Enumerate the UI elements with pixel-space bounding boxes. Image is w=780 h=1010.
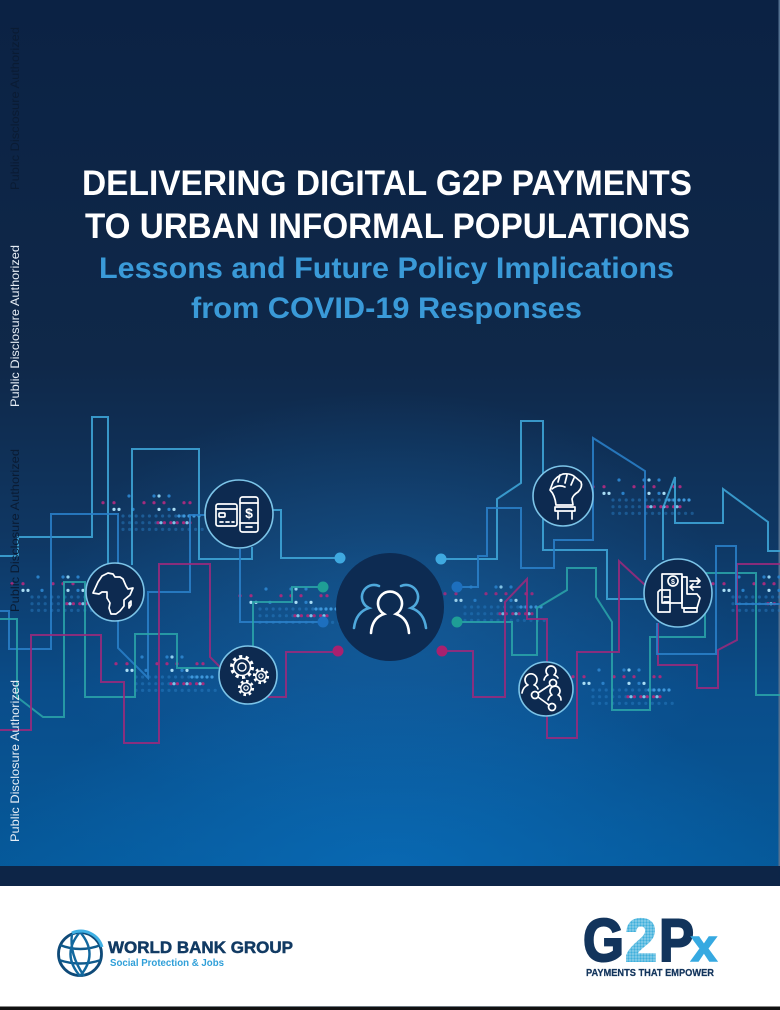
logo: G2Px [583,907,717,979]
side stamps: Public Disclosure Authorized: Public Disclosure Authorized [9,27,22,190]
black bottom edge [0,1006,780,1010]
title: DELIVERING DIGITAL G2P PAYMENTS [82,164,692,203]
side stamps: Public Disclosure Authorized: Public Disclosure Authorized [9,245,22,407]
subtitle: Lessons and Future Policy Implications [99,252,674,285]
white logo strip [0,886,780,1006]
dark footer band [0,866,780,886]
circuit skyline: right [441,421,780,738]
icon: raised fist [533,466,593,526]
icon: connected people network [519,662,573,716]
icon: gears [219,646,277,704]
icon: hand with money [644,559,712,627]
logo: World Bank Group: WORLD BANK GROUP [108,938,293,957]
logo: G2Px: PAYMENTS THAT EMPOWER [586,967,714,979]
subtitle: from COVID-19 Responses [191,292,582,325]
connector dots left [318,552,346,656]
logo: G2Px: 2 [625,907,657,974]
logo: G2Px: G [583,907,624,974]
side stamps: Public Disclosure Authorized: Public Disclosure Authorized [9,680,22,842]
title [82,164,692,246]
logo: G2Px: P [659,907,694,974]
icon: cards and phone [205,480,273,548]
connector dots right [436,554,462,656]
icon: Africa map [86,563,144,621]
icon: central people [336,553,444,661]
logo: World Bank Group: Social Protection & Jobs [110,958,224,969]
title: TO URBAN INFORMAL POPULATIONS [85,207,690,246]
data dot clusters [12,480,780,703]
icon: hand with money: $ [671,579,675,586]
subtitle [99,252,674,325]
logo: G2Px: x [691,920,717,971]
side stamps: Public Disclosure Authorized [9,27,22,842]
side stamps: Public Disclosure Authorized: Public Disclosure Authorized [9,449,22,612]
icon: cards and phone: $ [245,505,253,521]
circuit skyline: left [0,417,340,743]
logo: World Bank Group [58,931,293,976]
icon: globe [58,931,102,976]
